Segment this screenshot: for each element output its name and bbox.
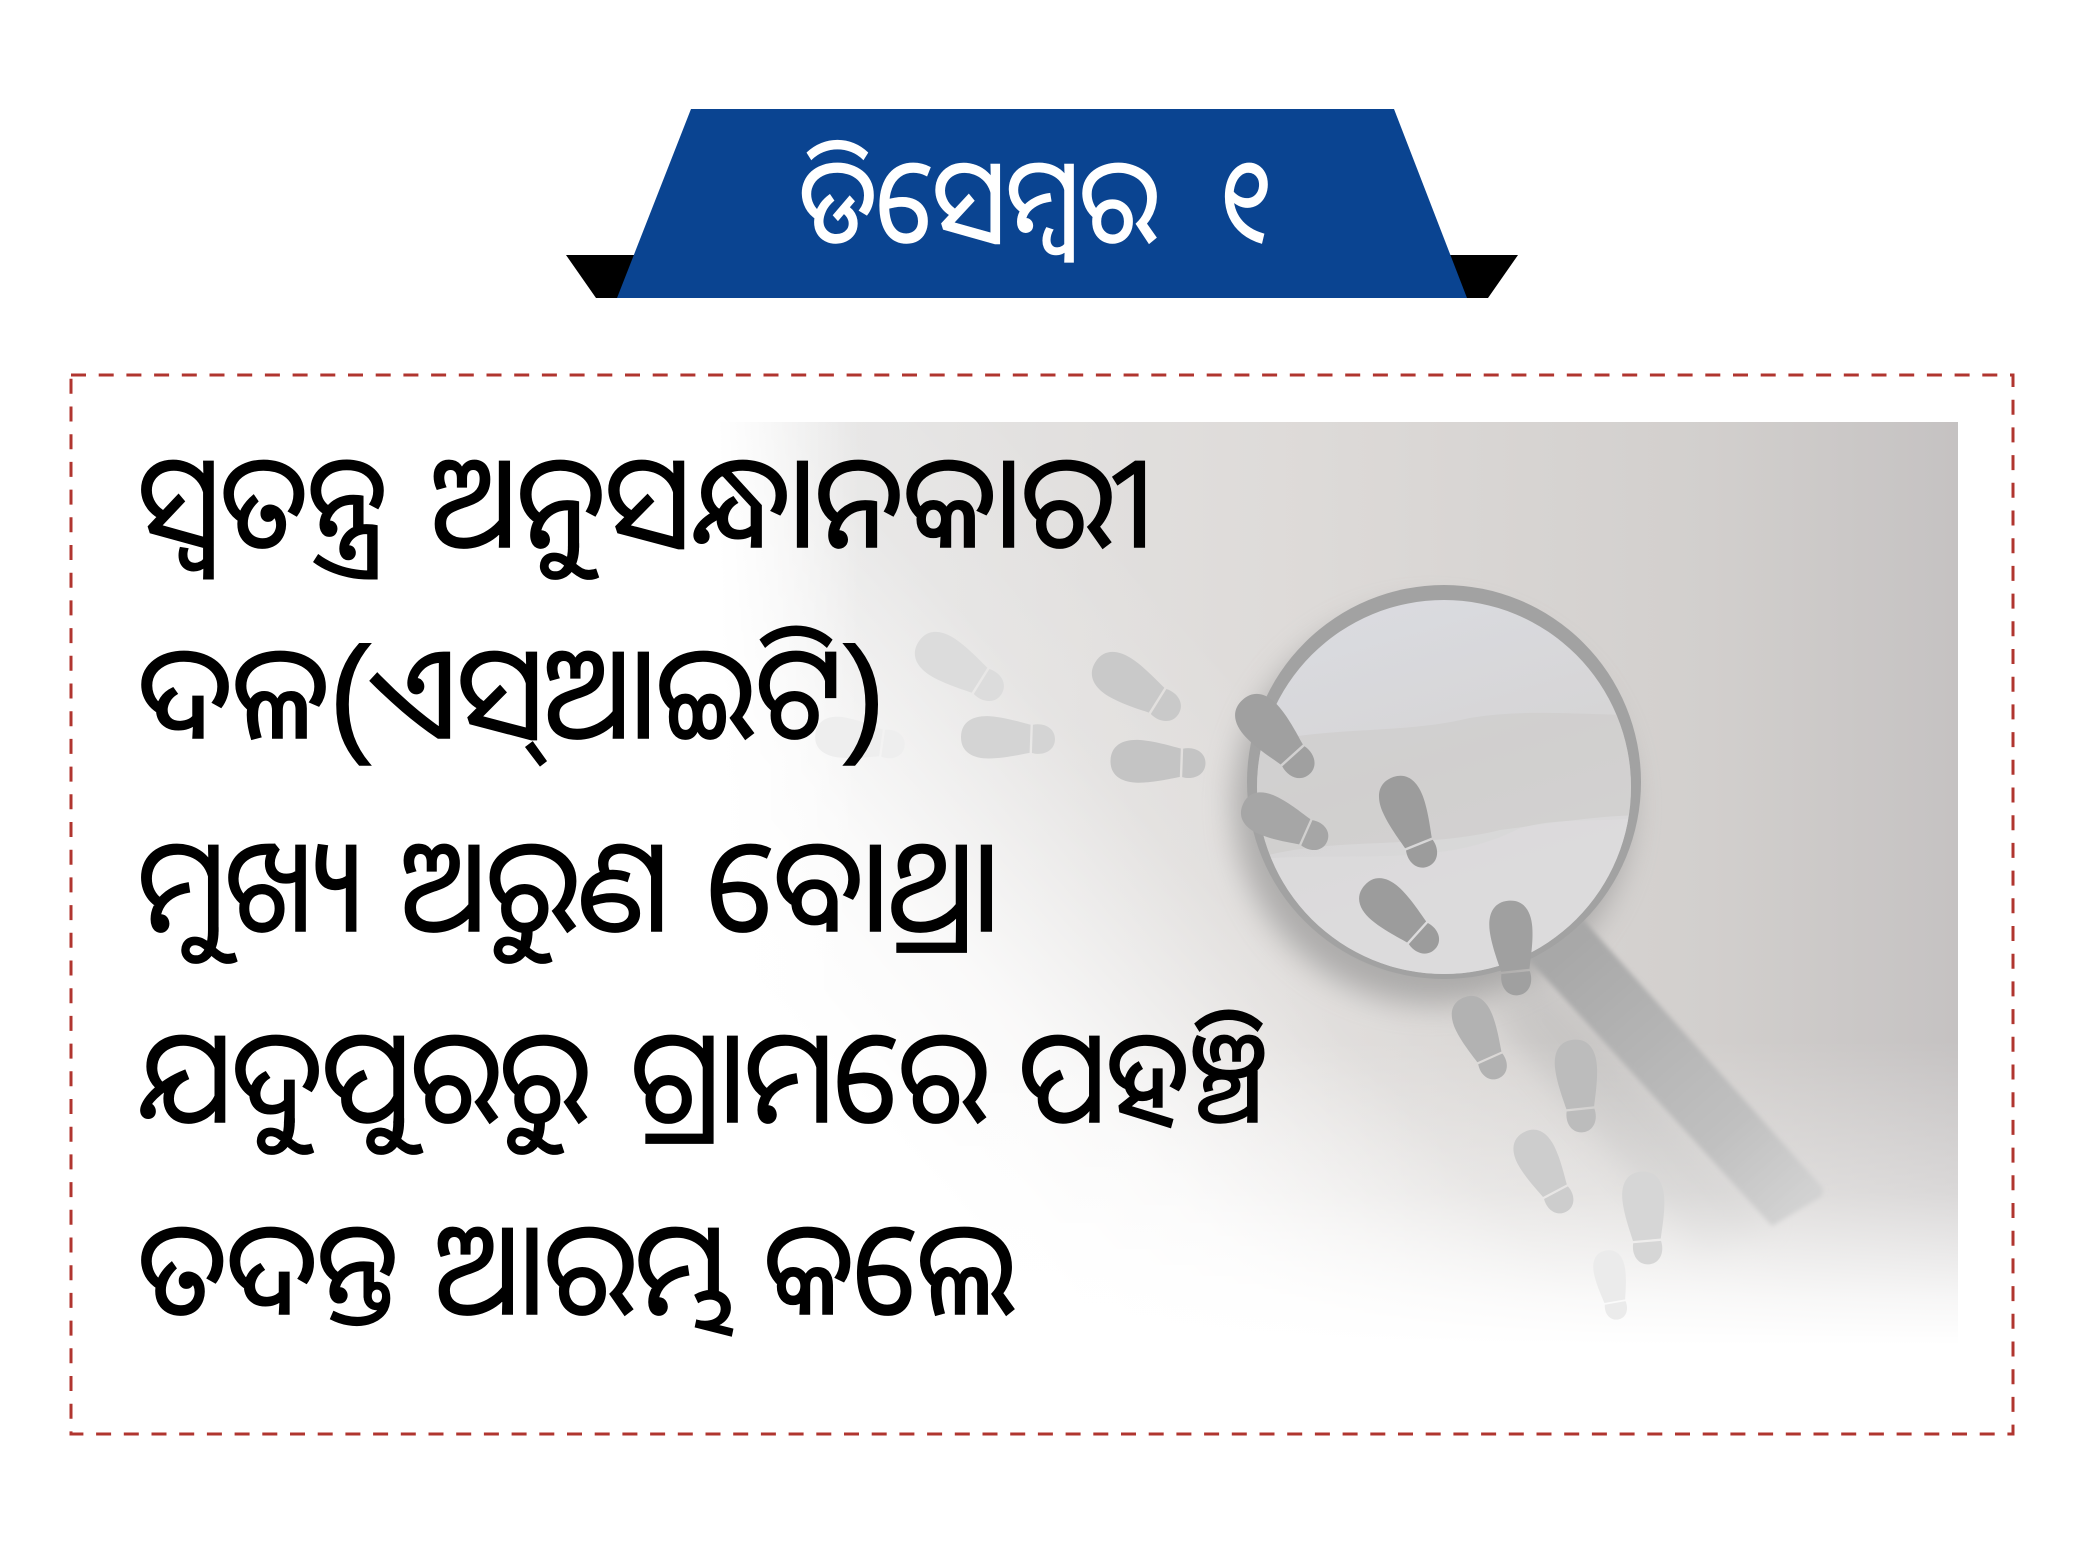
line 3: ଅରୁଣ <box>401 813 669 964</box>
footprints trail <box>813 623 1670 1322</box>
line 3: ବୋଥ୍ରା <box>707 813 999 959</box>
banner: date heading <box>617 109 1467 298</box>
line 4: ଗ୍ରାମରେ <box>631 1004 988 1150</box>
magnifier handle <box>1520 905 1823 1226</box>
line 3: ମୁଖ୍ୟ <box>138 813 363 964</box>
magnifier lens <box>1247 585 1650 1000</box>
magnifier handle shadow <box>1490 970 1775 1260</box>
line 5: କଲେ <box>764 1196 1016 1342</box>
line 4: ପହଞ୍ଚି <box>1019 1004 1268 1150</box>
line 5: ତଦନ୍ତ <box>138 1196 398 1342</box>
banner title: ଡିସେମ୍ବର <box>799 136 1158 268</box>
line 3 <box>138 813 999 964</box>
magnifier shadow <box>1234 608 1630 1004</box>
line 1: ସ୍ୱତନ୍ତ୍ର <box>138 429 387 579</box>
line 4: ଯଦୁପୁରରୁ <box>138 1004 589 1155</box>
line 2: ଦଳ(ଏସ୍‌ଆଇଟି) <box>138 620 885 766</box>
banner title: ୧ <box>1219 136 1272 268</box>
image: magnifying glass and footprints <box>718 422 1958 1345</box>
line 1 <box>138 429 1152 580</box>
line 4 <box>138 1004 1268 1155</box>
line 5 <box>138 1196 1016 1342</box>
ribbon fold: left <box>566 255 700 298</box>
story text <box>138 429 1268 1342</box>
line 5: ଆରମ୍ଭ <box>435 1196 736 1342</box>
line 1: ଅନୁସନ୍ଧାନକାରୀ <box>431 429 1152 580</box>
panel: dashed story frame <box>71 375 2013 1434</box>
ribbon fold: right <box>1380 255 1518 298</box>
